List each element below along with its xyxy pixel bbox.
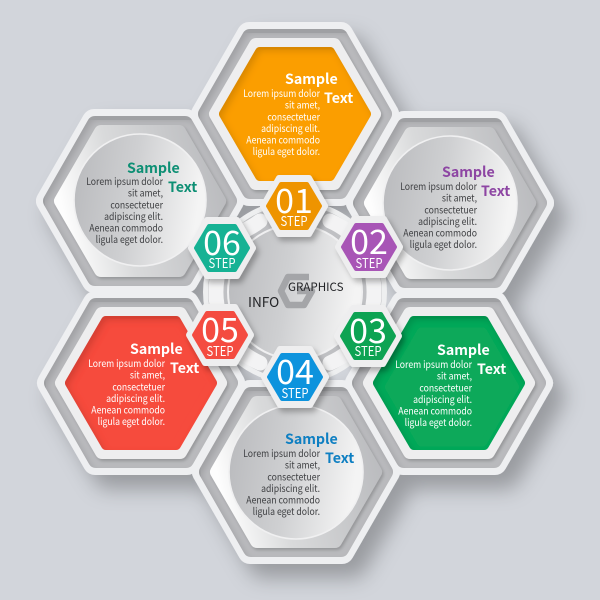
text block: lower left: sit amet, — [130, 367, 165, 382]
step 02 badge: STEP — [356, 252, 382, 272]
step 04 badge — [264, 345, 326, 405]
step 06 badge — [191, 216, 253, 276]
text block: upper right: ligula eget dolor. — [410, 236, 477, 251]
heading: sample text upper left: Sample — [127, 158, 180, 178]
outer hexagon frames — [48, 34, 542, 552]
step 05 badge: STEP — [206, 340, 234, 360]
heading: sample text upper right: Sample — [442, 162, 495, 182]
text block: bottom: Aenean commodo — [246, 492, 320, 507]
heading: sample text top: Sample — [285, 69, 338, 89]
text block: lower right: sit amet, — [437, 368, 472, 383]
icon: hexagonal G logo — [281, 277, 312, 305]
text block: bottom: adipiscing elit. — [261, 480, 320, 495]
panel: sample text lower right — [360, 306, 538, 460]
text block: lower right: Lorem ipsum dolor — [395, 356, 472, 371]
text block: upper left: ligula eget dolor. — [96, 231, 163, 246]
text block: upper left: adipiscing elit. — [104, 208, 163, 223]
text block: bottom: consectetuer — [267, 469, 320, 484]
panel: sample text upper left — [51, 124, 229, 278]
heading: sample text bottom: Text — [325, 448, 354, 468]
panel: sample text upper right — [361, 126, 539, 280]
text block: lower right: ligula eget dolor. — [405, 414, 472, 429]
step 01 badge: STEP — [280, 210, 308, 230]
text block: lower right: Aenean commodo — [398, 403, 472, 418]
text block: lower left: Lorem ipsum dolor — [88, 355, 165, 370]
step 06 badge: 06 — [203, 216, 241, 265]
text block: lower left: adipiscing elit. — [106, 390, 165, 405]
text block: lower right: consectetuer — [419, 380, 472, 395]
text block: top: Aenean commodo — [246, 132, 320, 147]
heading: sample text upper right: Text — [481, 181, 510, 201]
heading: sample text lower right: Sample — [437, 340, 490, 360]
step 05 badge: 05 — [201, 303, 239, 352]
text block: top: ligula eget dolor. — [253, 143, 320, 158]
step 04 badge: 04 — [276, 345, 314, 394]
heading: sample text lower left: Sample — [130, 339, 183, 359]
text block: bottom: ligula eget dolor. — [253, 503, 320, 518]
text block: upper left: consectetuer — [110, 197, 163, 212]
step 01 badge: 01 — [275, 174, 313, 223]
text block: top: consectetuer — [267, 109, 320, 124]
text block: top: adipiscing elit. — [261, 120, 320, 135]
step 01 badge — [263, 174, 325, 234]
heading: sample text lower left: Text — [170, 358, 199, 378]
panel: sample text bottom — [207, 395, 385, 549]
step 03 badge: STEP — [354, 340, 382, 360]
step 05 badge — [189, 303, 251, 363]
text block: upper left: sit amet, — [128, 185, 163, 200]
text block: lower right: adipiscing elit. — [413, 391, 472, 406]
text block: upper right: Aenean commodo — [403, 225, 477, 240]
center hub — [203, 200, 387, 384]
step 06 badge: STEP — [208, 252, 236, 272]
label: info: INFO — [248, 291, 279, 311]
text block: bottom: Lorem ipsum dolor — [243, 445, 320, 460]
heading: sample text upper left: Text — [168, 177, 197, 197]
step 03 badge: 03 — [349, 304, 387, 353]
text block: upper left: Aenean commodo — [89, 220, 163, 235]
text block: upper left: Lorem ipsum dolor — [86, 173, 163, 188]
text block: lower left: consectetuer — [112, 379, 165, 394]
heading: sample text bottom: Sample — [285, 429, 338, 449]
text block: bottom: sit amet, — [285, 457, 320, 472]
heading: sample text top: Text — [324, 88, 353, 108]
text block: top: sit amet, — [285, 97, 320, 112]
step 02 badge — [338, 215, 400, 275]
label: graphics: GRAPHICS — [288, 279, 344, 295]
panel: sample text lower left — [52, 306, 230, 460]
text block: upper right: consectetuer — [424, 202, 477, 217]
text block: lower left: Aenean commodo — [91, 402, 165, 417]
heading: sample text lower right: Text — [477, 359, 506, 379]
text block: upper right: Lorem ipsum dolor — [400, 178, 477, 193]
step 03 badge — [337, 304, 399, 364]
text block: top: Lorem ipsum dolor — [243, 85, 320, 100]
text block: upper right: adipiscing elit. — [418, 213, 477, 228]
step 04 badge: STEP — [282, 382, 308, 402]
panel: sample text top — [206, 37, 384, 191]
step 02 badge: 02 — [350, 215, 388, 264]
text block: lower left: ligula eget dolor. — [98, 413, 165, 428]
text block: upper right: sit amet, — [442, 190, 477, 205]
